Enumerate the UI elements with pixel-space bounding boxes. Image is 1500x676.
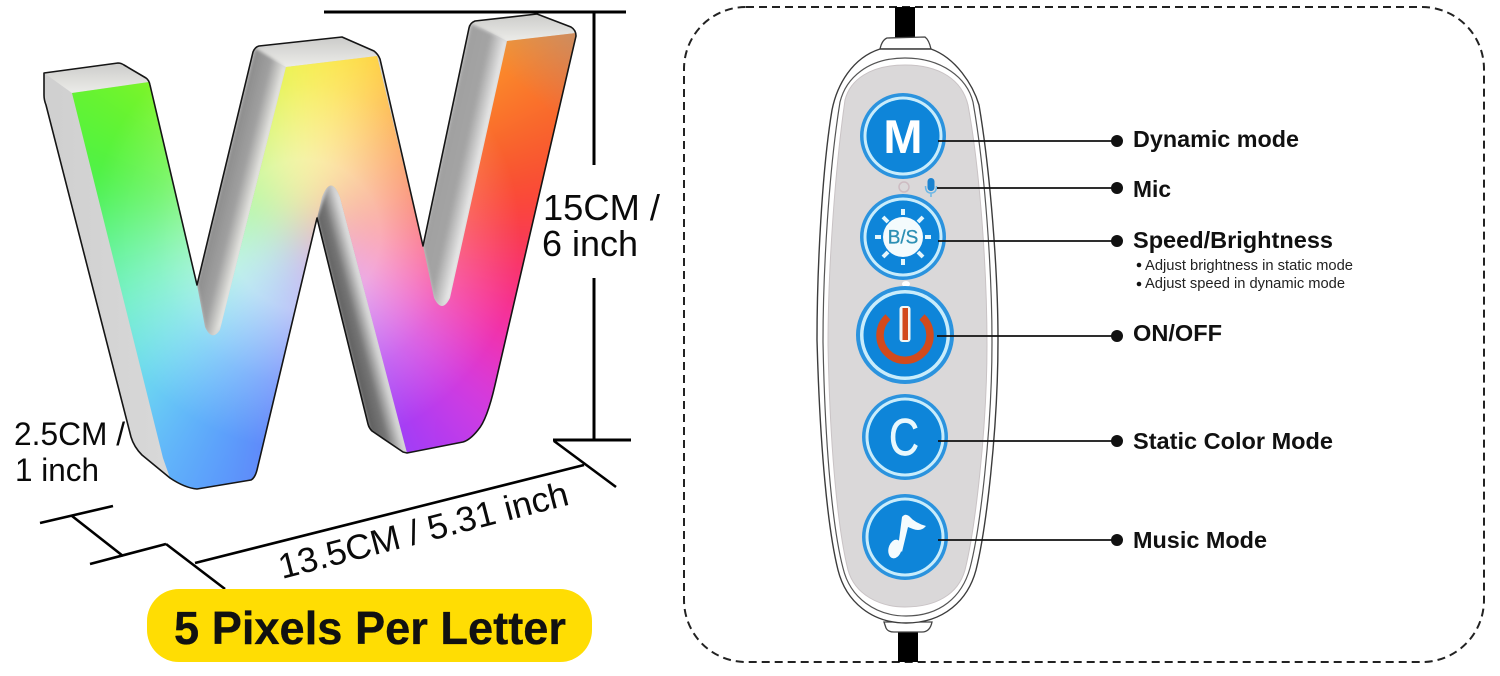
label: music mode: Music Mode — [1133, 527, 1267, 553]
label: dynamic mode: Dynamic mode — [1133, 126, 1299, 152]
depth label — [14, 416, 125, 488]
height label: 6 inch — [542, 223, 638, 264]
button: music note — [862, 494, 948, 580]
depth label: 2.5CM / — [14, 416, 125, 452]
remote control body — [817, 7, 998, 662]
leader lines and dots — [937, 135, 1123, 546]
height dimension line — [324, 12, 631, 440]
button: C static color — [862, 394, 948, 480]
dashed frame — [684, 7, 1484, 662]
W inner notch faces — [197, 24, 507, 456]
icon: microphone — [926, 178, 936, 197]
indicator light — [899, 182, 909, 192]
width label: 13.5CM / 5.31 inch — [274, 474, 573, 587]
button: B/S speed and brightness — [860, 194, 946, 280]
label: mic: Mic — [1133, 176, 1171, 202]
label: static color mode: Static Color Mode — [1133, 428, 1333, 454]
indicator bar — [902, 281, 910, 287]
W top faces — [50, 26, 574, 93]
notes: speed and brightness: Adjust brightness in static mode — [1145, 258, 1353, 274]
W left side face — [40, 70, 180, 495]
yellow pill: 5 pixels per letter — [147, 589, 592, 662]
yellow pill: 5 pixels per letter: 5 Pixels Per Letter — [174, 602, 566, 654]
height label: 15CM / — [543, 187, 660, 228]
panel: remote control diagram — [684, 7, 1484, 662]
depth dimension line — [40, 506, 166, 564]
letter W 3D illustration — [43, 14, 577, 490]
width dimension line — [166, 441, 616, 589]
button: C static color: C — [889, 409, 919, 467]
W outline — [44, 14, 576, 489]
button: B/S speed and brightness: B/S — [888, 228, 918, 248]
button: power on/off — [856, 286, 954, 384]
height label — [542, 187, 660, 264]
label: on/off: ON/OFF — [1133, 320, 1222, 346]
depth label: 1 inch — [15, 452, 99, 488]
notes: speed and brightness: Adjust speed in dynamic mode — [1145, 276, 1345, 292]
panel: W letter with dimensions — [0, 0, 660, 662]
notes: speed and brightness — [1137, 258, 1353, 292]
button: M dynamic mode — [860, 93, 946, 179]
label: speed/brightness: Speed/Brightness — [1133, 227, 1333, 253]
W gradient front face — [72, 33, 576, 488]
button: M dynamic mode: M — [883, 110, 923, 163]
